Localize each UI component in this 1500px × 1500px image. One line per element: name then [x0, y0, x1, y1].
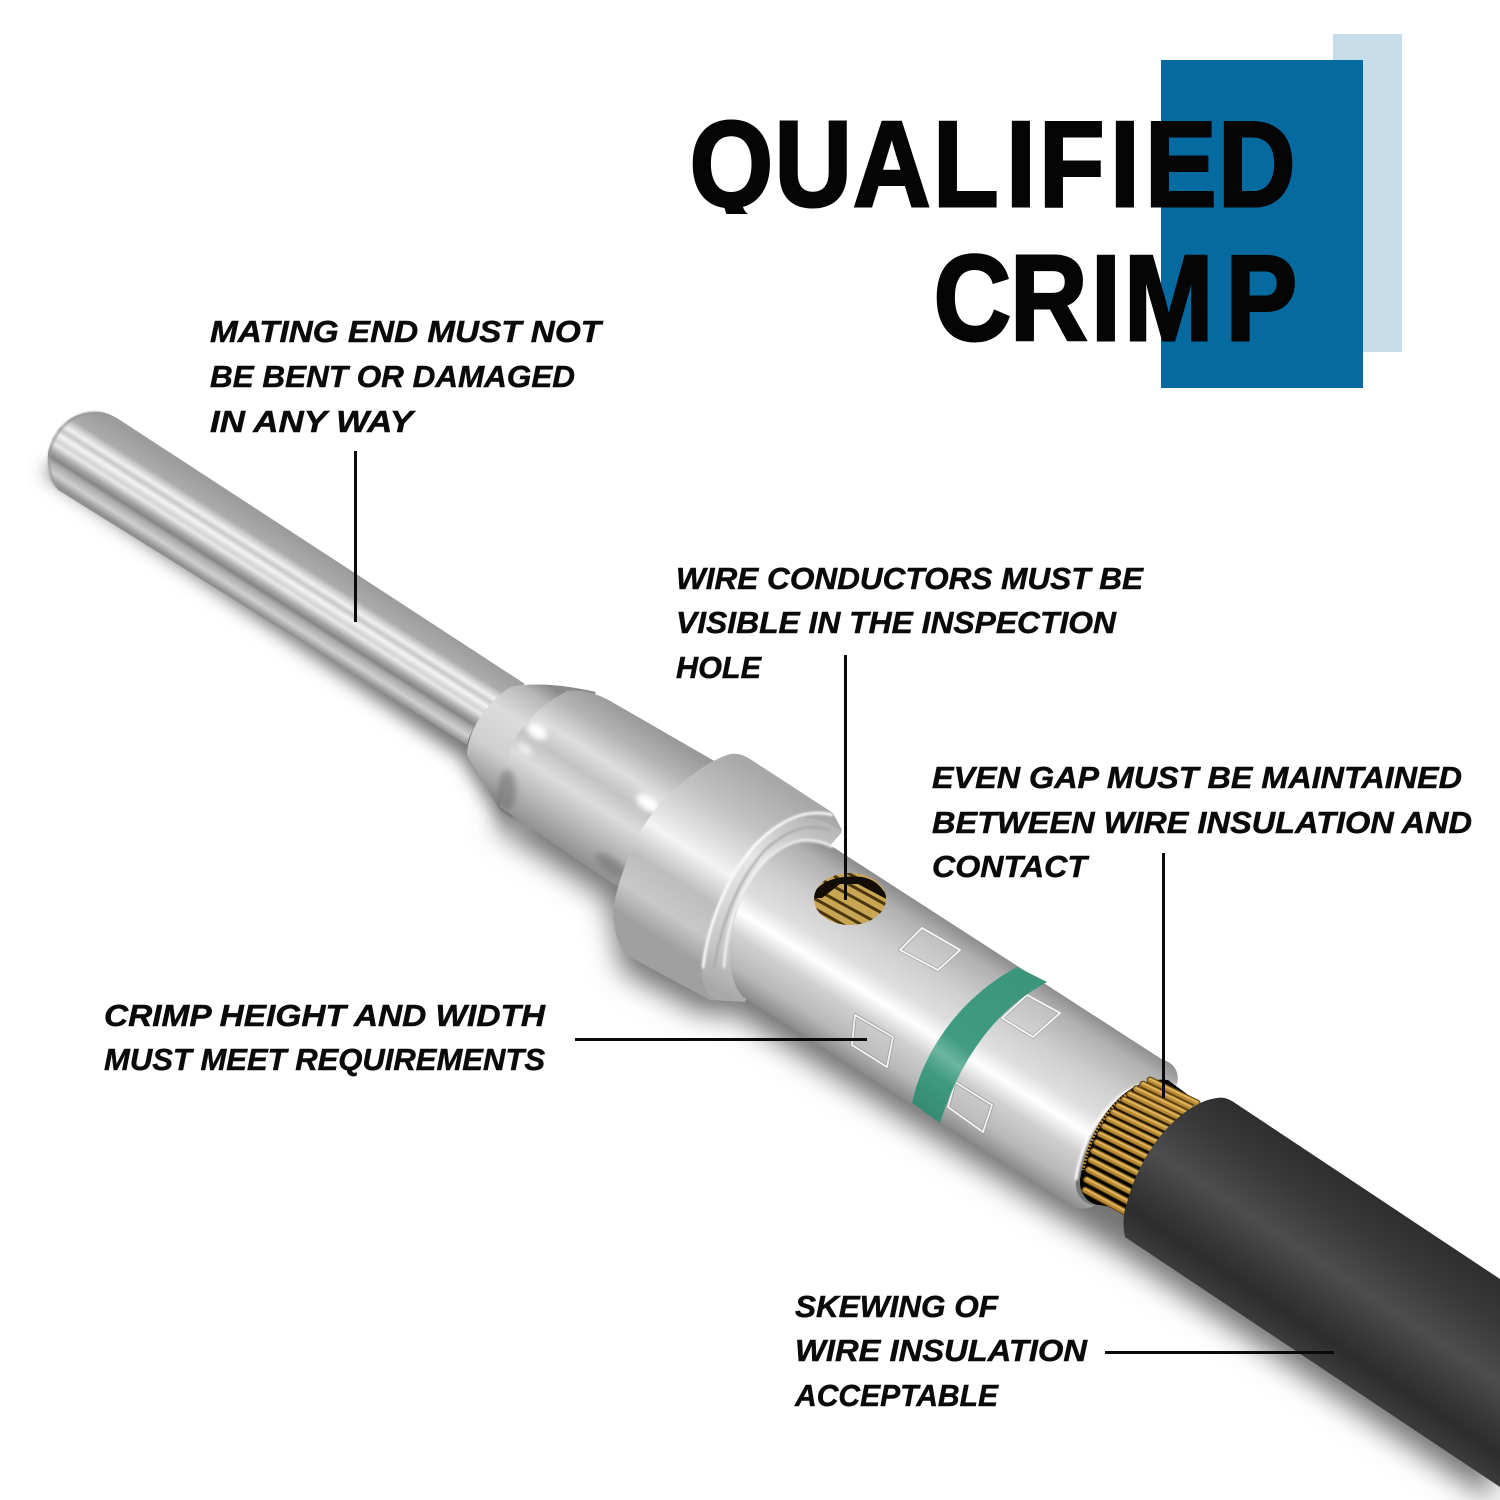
label: skewing: WIRE INSULATION — [795, 1333, 1088, 1368]
illustration: crimp contact and wire — [48, 412, 1500, 1487]
leader line: skewing — [1105, 1351, 1334, 1354]
label: skewing: ACCEPTABLE — [794, 1378, 999, 1413]
title: CRIMP — [934, 231, 1297, 367]
conductor ring — [1083, 1082, 1158, 1170]
label: mating end: BE BENT OR DAMAGED — [210, 359, 575, 394]
background accent: pale blue rectangle — [1333, 34, 1402, 352]
cone shoulder — [467, 685, 596, 818]
label: even gap — [932, 760, 1472, 884]
pin tip rim — [49, 413, 104, 488]
front barrel — [500, 691, 730, 900]
barrel highlights and dark spots — [498, 719, 663, 883]
label: crimp height — [104, 998, 546, 1077]
leader line: mating end — [354, 451, 357, 622]
rim strokes — [703, 813, 1176, 1180]
label: inspection hole: VISIBLE IN THE INSPECTION — [676, 605, 1117, 640]
wire conductors — [1085, 1079, 1197, 1213]
background accent: blue rectangle — [1161, 60, 1363, 388]
title: QUALIFIED — [690, 97, 1296, 233]
crimp mark — [900, 928, 960, 970]
label: even gap: BETWEEN WIRE INSULATION AND — [932, 805, 1472, 840]
label: even gap: CONTACT — [932, 849, 1090, 884]
label: inspection hole: WIRE CONDUCTORS MUST BE — [676, 561, 1144, 596]
label: skewing — [794, 1289, 1088, 1413]
leader line: even gap — [1162, 853, 1165, 1098]
label: mating end: IN ANY WAY — [210, 404, 417, 439]
label: even gap: EVEN GAP MUST BE MAINTAINED — [932, 760, 1462, 795]
contact shadow — [42, 442, 1492, 1500]
green band — [912, 967, 1047, 1123]
label: inspection hole — [676, 561, 1144, 685]
label: mating end: MATING END MUST NOT — [210, 314, 604, 349]
collar — [614, 754, 842, 1002]
leader line: inspection hole — [844, 655, 847, 900]
leader line: crimp height — [575, 1038, 867, 1041]
crimp mark — [852, 1015, 893, 1067]
label: skewing: SKEWING OF — [795, 1289, 999, 1324]
wire insulation — [1124, 1098, 1500, 1487]
wire opening — [1080, 1080, 1195, 1210]
label: crimp height: MUST MEET REQUIREMENTS — [104, 1042, 545, 1077]
label: crimp height: CRIMP HEIGHT AND WIDTH — [104, 998, 546, 1033]
title — [692, 120, 1295, 342]
crimp mark — [948, 1082, 992, 1132]
label: mating end — [210, 314, 604, 439]
label: inspection hole: HOLE — [676, 650, 762, 685]
crimp mark — [1002, 995, 1060, 1037]
rear barrel — [730, 840, 1178, 1209]
inspection hole — [814, 873, 886, 925]
collar rim — [702, 818, 842, 1002]
pin: mating end — [48, 412, 525, 745]
